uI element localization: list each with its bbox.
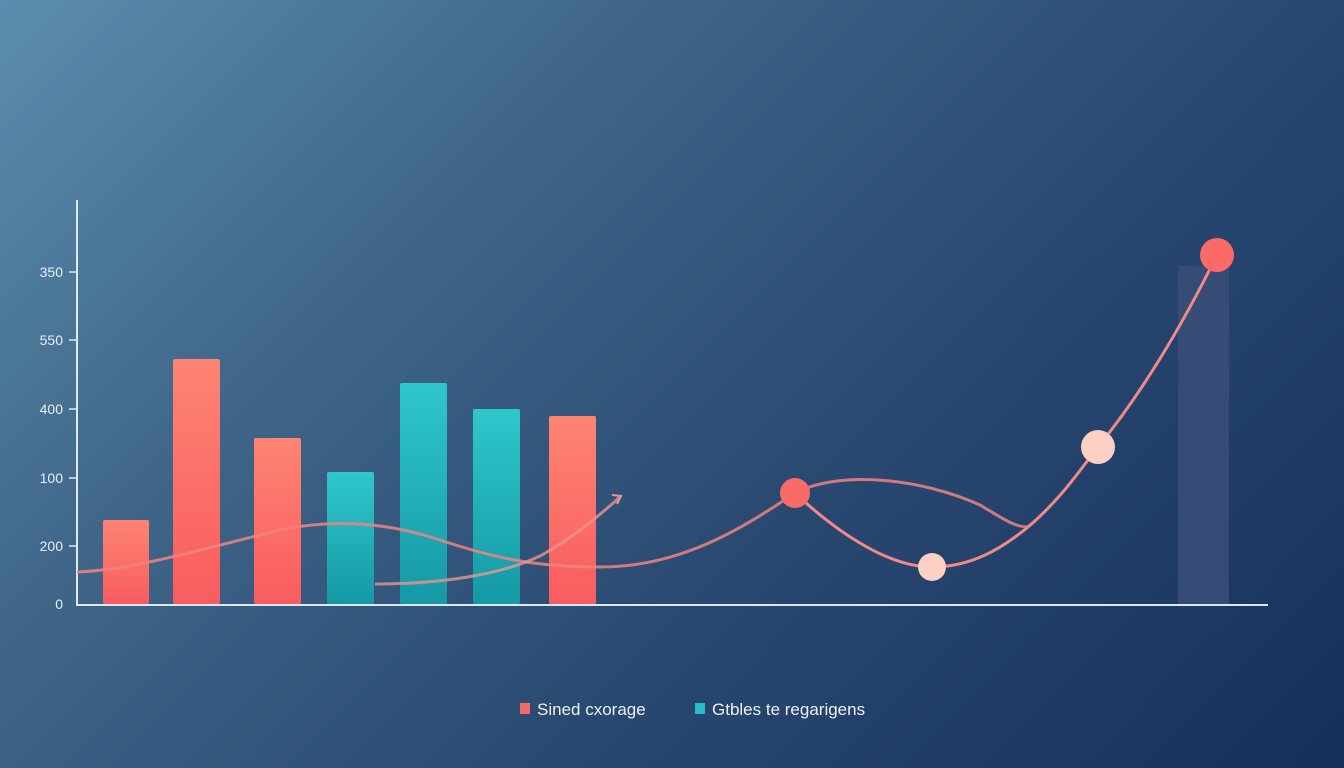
y-axis labels: 550 [40,332,63,348]
y-axis labels: 200 [40,538,63,554]
y-axis labels: 100 [40,470,63,486]
legend: Sined cxorage [537,700,646,719]
legend [520,700,865,719]
y-axis labels: 0 [55,596,63,612]
y-axis labels: 350 [40,264,63,280]
dark highlight bar [1178,266,1229,604]
data points [780,238,1234,581]
bars [103,359,596,604]
legend: Gtbles te regarigens [712,700,865,719]
y-axis labels [40,264,63,612]
axes [69,200,1268,605]
y-axis labels: 400 [40,401,63,417]
trend line curves [77,255,1217,584]
